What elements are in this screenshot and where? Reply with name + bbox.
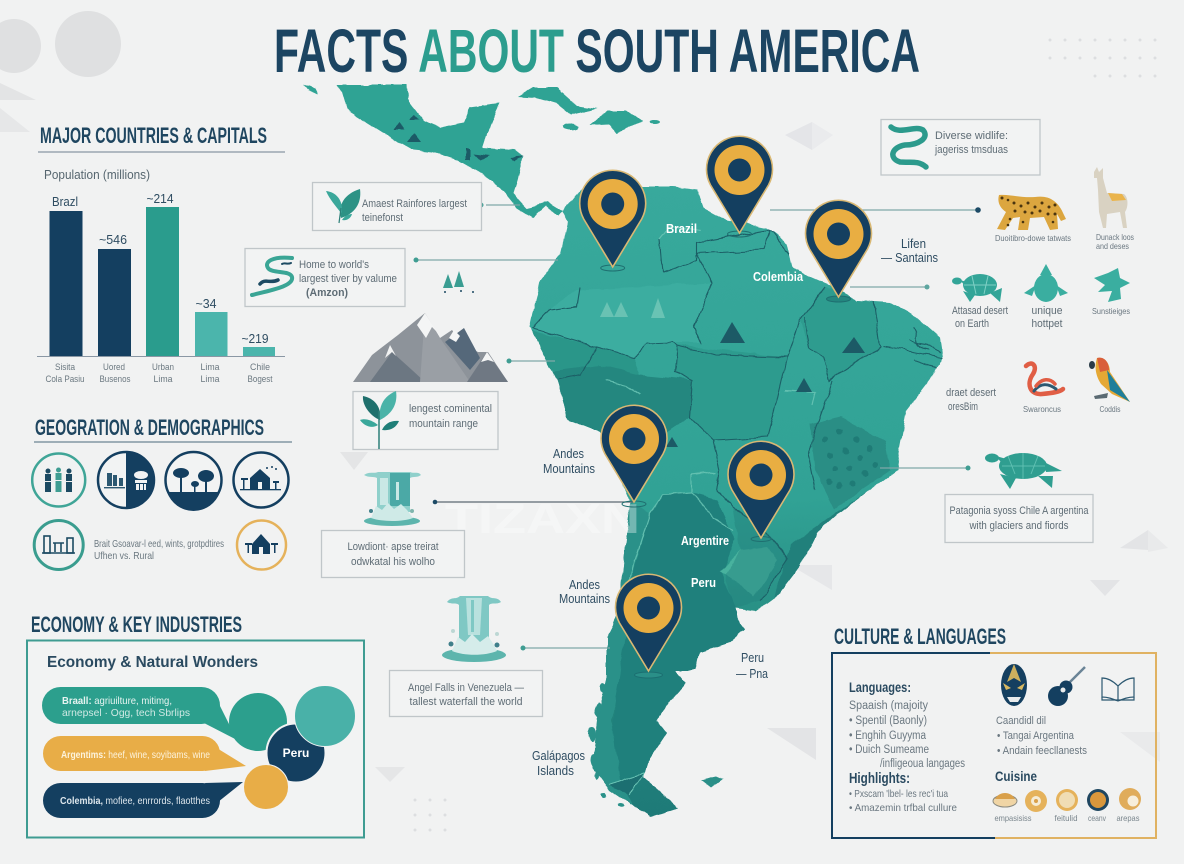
- map pin 3: [806, 200, 872, 302]
- bar chart: Urban: [152, 362, 174, 373]
- panel frame: [832, 653, 1156, 838]
- callout: largest river: Home to world's: [299, 259, 369, 271]
- bubble: Argentina: [43, 736, 246, 771]
- text: desert note: draet desert: [946, 387, 996, 399]
- heading: CULTURE & LANGUAGES: [834, 624, 1006, 649]
- callout: box under waterfall: [322, 530, 464, 578]
- cuisine labels: empasisiss: [994, 813, 1032, 823]
- callout: box under waterfall: Lowdiont· apse treirat: [348, 541, 438, 553]
- callout: largest river: [245, 248, 405, 306]
- map labels: Argentire: [681, 534, 729, 548]
- icon: snake: [891, 127, 926, 167]
- region: Argentina: [610, 493, 745, 780]
- map labels: — Santains: [881, 251, 938, 265]
- bar chart: ~219: [242, 331, 268, 346]
- panel: economy and key industries: [27, 612, 364, 838]
- callout: mountain range: mountain range: [409, 418, 478, 430]
- carnival and festivals list: • Tangai Argentina: [997, 730, 1075, 742]
- bar chart: Cola Pasiu: [46, 374, 84, 385]
- callout: Angel Falls: [390, 670, 542, 716]
- icon: flamingo: [1026, 364, 1063, 394]
- map pin 6: [616, 574, 682, 678]
- callout: Patagonia: [945, 494, 1093, 542]
- icon: guitar: [1048, 667, 1085, 706]
- map: South America countries: [530, 178, 943, 820]
- languages list: • Spentil (Baonly): [849, 715, 927, 727]
- region: Uruguay: [720, 547, 778, 597]
- icon: mountains: [353, 313, 508, 382]
- title: FACTS ABOUT SOUTH AMERICA: [274, 17, 920, 85]
- connector dots: [414, 202, 981, 650]
- bar chart: Sisita: [55, 362, 76, 373]
- icon: jaguar: [997, 195, 1066, 230]
- icon: fish shape: [1094, 268, 1130, 302]
- Chile archipelago islands: [588, 683, 623, 807]
- callout: diverse wildlife: Diverse widlife:: [935, 130, 1008, 142]
- icon: small trees: [443, 271, 474, 293]
- icon: people: [32, 454, 85, 506]
- map labels: Islands: [537, 764, 574, 778]
- cuisine labels: feitulid: [1054, 813, 1078, 823]
- map labels: [532, 222, 938, 778]
- bar chart: Lima: [154, 374, 173, 385]
- bar chart: ~546: [99, 232, 127, 247]
- map markers: pale trees on map: [600, 298, 665, 318]
- Tierra del Fuego highlight: [610, 772, 645, 795]
- chart subtitle: Population (millions): [44, 167, 150, 182]
- carnival and festivals list: [996, 715, 1087, 757]
- bar chart: Chile: [250, 362, 270, 373]
- callout: Amazon rainforest: [312, 182, 482, 230]
- bar chart: Brazl: [52, 194, 78, 209]
- caption: turtle: [952, 305, 1008, 330]
- icon: waterfall one: [364, 472, 421, 526]
- callout: Amazon rainforest: Amaest Rainfores largest: [362, 198, 467, 210]
- icon: turtle: [952, 274, 1002, 302]
- callout: mountain range: [353, 391, 498, 450]
- callout: diverse wildlife: [881, 120, 1040, 175]
- languages list: /infligeoua langages: [880, 758, 965, 770]
- panel: major countries and capitals: [37, 123, 285, 385]
- bar chart: Bogest: [248, 374, 273, 385]
- cuisine labels: arepas: [1116, 813, 1140, 823]
- callout: Patagonia: Patagonia syoss Chile A argentina: [950, 505, 1089, 517]
- caption: turtle: on Earth: [955, 318, 989, 330]
- map labels: Peru: [691, 576, 716, 590]
- languages list: • Duich Sumeame: [849, 744, 929, 756]
- languages list: • Pxscam 'lbel- les rec'i tua: [849, 788, 948, 800]
- bubble: Brazil: Braall: agriuilture, mitimg,: [62, 695, 172, 707]
- map labels: — Pna: [736, 667, 768, 681]
- map labels: Peru: [741, 651, 764, 665]
- map: Central America and Caribbean: [303, 84, 659, 218]
- bar chart: Lima: [200, 374, 220, 385]
- bar chart: [37, 191, 285, 385]
- caption: hotspot: unique: [1032, 305, 1062, 317]
- caption: turtle: Attasad desert: [952, 305, 1008, 317]
- region: Bolivia: [675, 345, 787, 440]
- icons: cuisine foods: [993, 788, 1141, 812]
- region: Peru: [552, 366, 692, 433]
- text: urban vs rural: [94, 538, 224, 562]
- bar chart: Uored: [103, 362, 125, 373]
- bubble: Brazil: arnepsel · Ogg, tech Sbrlips: [62, 707, 190, 719]
- icon: manatee shape: [1024, 264, 1068, 302]
- icon: rural house: [237, 520, 286, 570]
- text: urban vs rural: Ufhen vs. Rural: [94, 550, 154, 562]
- languages list: Highlights:: [849, 771, 910, 787]
- line connectors: [416, 205, 978, 648]
- callout: diverse wildlife: jageriss tmsduas: [934, 144, 1008, 156]
- text: desert note: oresBim: [948, 401, 978, 413]
- caption: llama: [1096, 232, 1134, 251]
- panel: geography and demographics: [32, 415, 292, 570]
- bar chart: Busenos: [100, 374, 131, 385]
- text: desert note: [946, 387, 996, 413]
- industry circles: Peru: [283, 746, 309, 760]
- caption: hotspot: hottpet: [1032, 318, 1062, 330]
- Falkland islands: [702, 776, 722, 787]
- caption: parrot: Coddis: [1100, 404, 1120, 414]
- callout: largest river: (Amzon): [306, 287, 348, 299]
- carnival and festivals list: • Andain feecllanests: [997, 745, 1087, 757]
- panel: culture and languages: [832, 624, 1156, 838]
- watermark: TIZAXN: [445, 495, 640, 542]
- map pin 4: [601, 405, 667, 507]
- map markers: mountains and forest on map: [666, 322, 865, 447]
- icon: city: [34, 520, 83, 570]
- callout: mountain range: lengest cominental: [409, 403, 492, 415]
- borders: [533, 230, 943, 600]
- icon: trees: [166, 452, 222, 511]
- caption: flamingo: Swaroncus: [1023, 404, 1061, 414]
- map labels: Galápagos: [532, 749, 585, 763]
- icon: leaf: [326, 189, 360, 223]
- heading: GEOGRATION & DEMOGRAPHICS: [35, 415, 264, 440]
- caption: hotspot: [1032, 305, 1062, 330]
- languages list: Spaaish (majoity: [849, 700, 928, 712]
- callout: Angel Falls: Angel Falls in Venezuela —: [408, 682, 524, 694]
- icon: house and trees: [234, 452, 288, 508]
- map labels: Andes: [553, 447, 584, 461]
- carnival and festivals list: Caandidl dil: [996, 715, 1046, 727]
- icon: leaves: [360, 391, 399, 449]
- bubble: Brazil: [42, 687, 237, 740]
- bubble: Colombia: [43, 782, 243, 818]
- cuisine heading: Cuisine: [995, 768, 1037, 784]
- map labels: Lifen: [901, 237, 926, 251]
- callout: Angel Falls: tallest waterfall the world: [410, 696, 522, 708]
- caption: llama: Dunack loos: [1096, 232, 1134, 242]
- bubble: Argentina: Argentims: heef, wine, soyibams, wine: [61, 749, 210, 761]
- bubble: Colombia: Colembia, mofiee, enrrords, flaotthes: [60, 795, 210, 807]
- languages list: Languages:: [849, 680, 911, 695]
- heading: MAJOR COUNTRIES & CAPITALS: [40, 123, 267, 148]
- map labels: Brazil: [666, 222, 697, 236]
- icon: parrot: [1089, 358, 1130, 402]
- callout: Patagonia: with glaciers and fiords: [969, 520, 1069, 532]
- map labels: Colembia: [753, 270, 804, 284]
- icon: sea turtle: [985, 453, 1062, 489]
- map labels: Mountains: [559, 592, 610, 606]
- cuisine labels: ceanv: [1088, 813, 1107, 823]
- sub heading: Economy & Natural Wonders: [47, 654, 258, 671]
- cuisine labels: [994, 813, 1140, 823]
- callout: largest river: largest tiver by valume: [299, 273, 397, 285]
- caption: jaguar: Duoitibro-dowe tatwats: [995, 233, 1071, 243]
- map labels: Andes: [569, 578, 600, 592]
- icon: urban and rural split: [98, 452, 154, 508]
- industry circles: [229, 686, 356, 810]
- map pin 1: [580, 170, 646, 271]
- bar chart: ~214: [146, 191, 174, 206]
- icon: llama: [1094, 167, 1128, 228]
- icon: book: [1102, 678, 1134, 701]
- icon: mask: [1001, 664, 1027, 706]
- region: Chile strip: [592, 503, 649, 806]
- caption: llama: and deses: [1096, 241, 1129, 251]
- region: Guiana block: [800, 287, 880, 380]
- map pin 5: [728, 441, 794, 542]
- map pin 2: [706, 136, 772, 237]
- region: northern Amazon lighter: [533, 283, 712, 357]
- caption: fish: Sunstieiges: [1092, 306, 1130, 316]
- callout: Amazon rainforest: teinefonst: [362, 212, 403, 224]
- text: urban vs rural: Brait Gsoavar-l eed, wints, grotpdtires: [94, 538, 224, 550]
- region: southern Brazil: [726, 508, 786, 600]
- callout: box under waterfall: odwkatal his wolho: [351, 556, 435, 568]
- region: forest patch: [810, 417, 890, 510]
- icon: waterfall two: [442, 596, 506, 662]
- map labels: Mountains: [543, 462, 595, 476]
- languages list: • Enghih Guyyma: [849, 730, 927, 742]
- bar chart: Lima: [200, 362, 220, 373]
- heading: ECONOMY & KEY INDUSTRIES: [31, 612, 242, 637]
- languages list: • Amazemin trfbal cullure: [849, 802, 957, 814]
- region: south-east coast: [774, 488, 873, 599]
- languages list: [849, 680, 965, 814]
- bar chart: ~34: [196, 296, 216, 311]
- region: Ecuador and north Peru: [530, 330, 640, 375]
- icon: river: [252, 258, 292, 295]
